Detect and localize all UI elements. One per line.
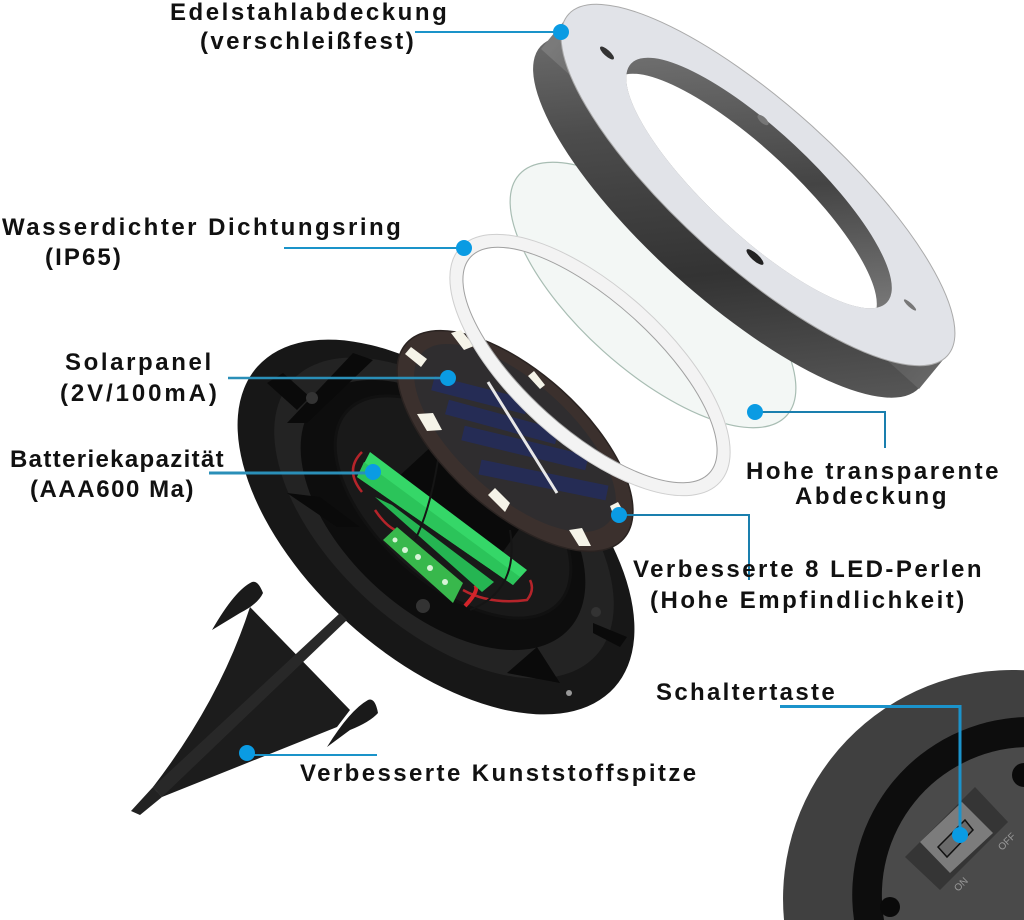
label: Verbesserte Kunststoffspitze: Verbesserte Kunststoffspitze (300, 760, 699, 787)
label: Batteriekapazität: Batteriekapazität (10, 446, 225, 473)
switch detail: underside of housing: OFF (996, 831, 1018, 853)
leader: Batteriekapazität (209, 464, 381, 480)
leader: transparente Abdeckung (747, 404, 885, 448)
label: Solarpanel: (2V/100mA) (60, 380, 220, 407)
label: Batteriekapazität: (AAA600 Ma) (30, 476, 195, 503)
transparent glass cover (469, 119, 837, 471)
leader: Schaltertaste (780, 706, 968, 843)
black housing (171, 270, 701, 784)
leader: Kunststoffspitze (239, 745, 377, 761)
label: Verbesserte 8 LED-Perlen: Verbesserte 8 LED-Perlen (633, 556, 984, 583)
battery pack and circuit board (353, 452, 532, 610)
stainless steel cover ring (533, 4, 956, 398)
switch detail: underside of housing (783, 670, 1024, 920)
label: Solarpanel (60, 349, 220, 407)
label: Verbesserte 8 LED-Perlen: (Hohe Empfindlichkeit) (650, 587, 967, 614)
label: Solarpanel: Solarpanel (65, 349, 214, 376)
label: Hohe transparente Abdeckung: Hohe transparente (746, 458, 1001, 485)
leader: LED-Perlen (611, 507, 749, 580)
solar panel disk with LED beads (360, 292, 670, 590)
label: Batteriekapazität (10, 446, 225, 503)
label: Verbesserte 8 LED-Perlen (633, 556, 984, 614)
label: Schaltertaste: Schaltertaste (656, 679, 837, 706)
label: Hohe transparente Abdeckung: Abdeckung (795, 483, 949, 510)
label: Wasserdichter Dichtungsring (2, 214, 403, 271)
plastic ground spike (131, 582, 378, 815)
label: Edelstahlabdeckung: (verschleißfest) (200, 28, 416, 55)
label: Wasserdichter Dichtungsring: Wasserdichter Dichtungsring (2, 214, 403, 241)
leader: Dichtungsring (284, 240, 472, 256)
label: Hohe transparente Abdeckung (746, 458, 1001, 510)
switch detail: underside of housing: ON (952, 876, 971, 894)
label: Wasserdichter Dichtungsring: (IP65) (45, 244, 123, 271)
leader: Edelstahlabdeckung (415, 24, 569, 40)
label: Edelstahlabdeckung (170, 0, 449, 55)
waterproof sealing ring (408, 190, 772, 540)
leader: Solarpanel (228, 370, 456, 386)
